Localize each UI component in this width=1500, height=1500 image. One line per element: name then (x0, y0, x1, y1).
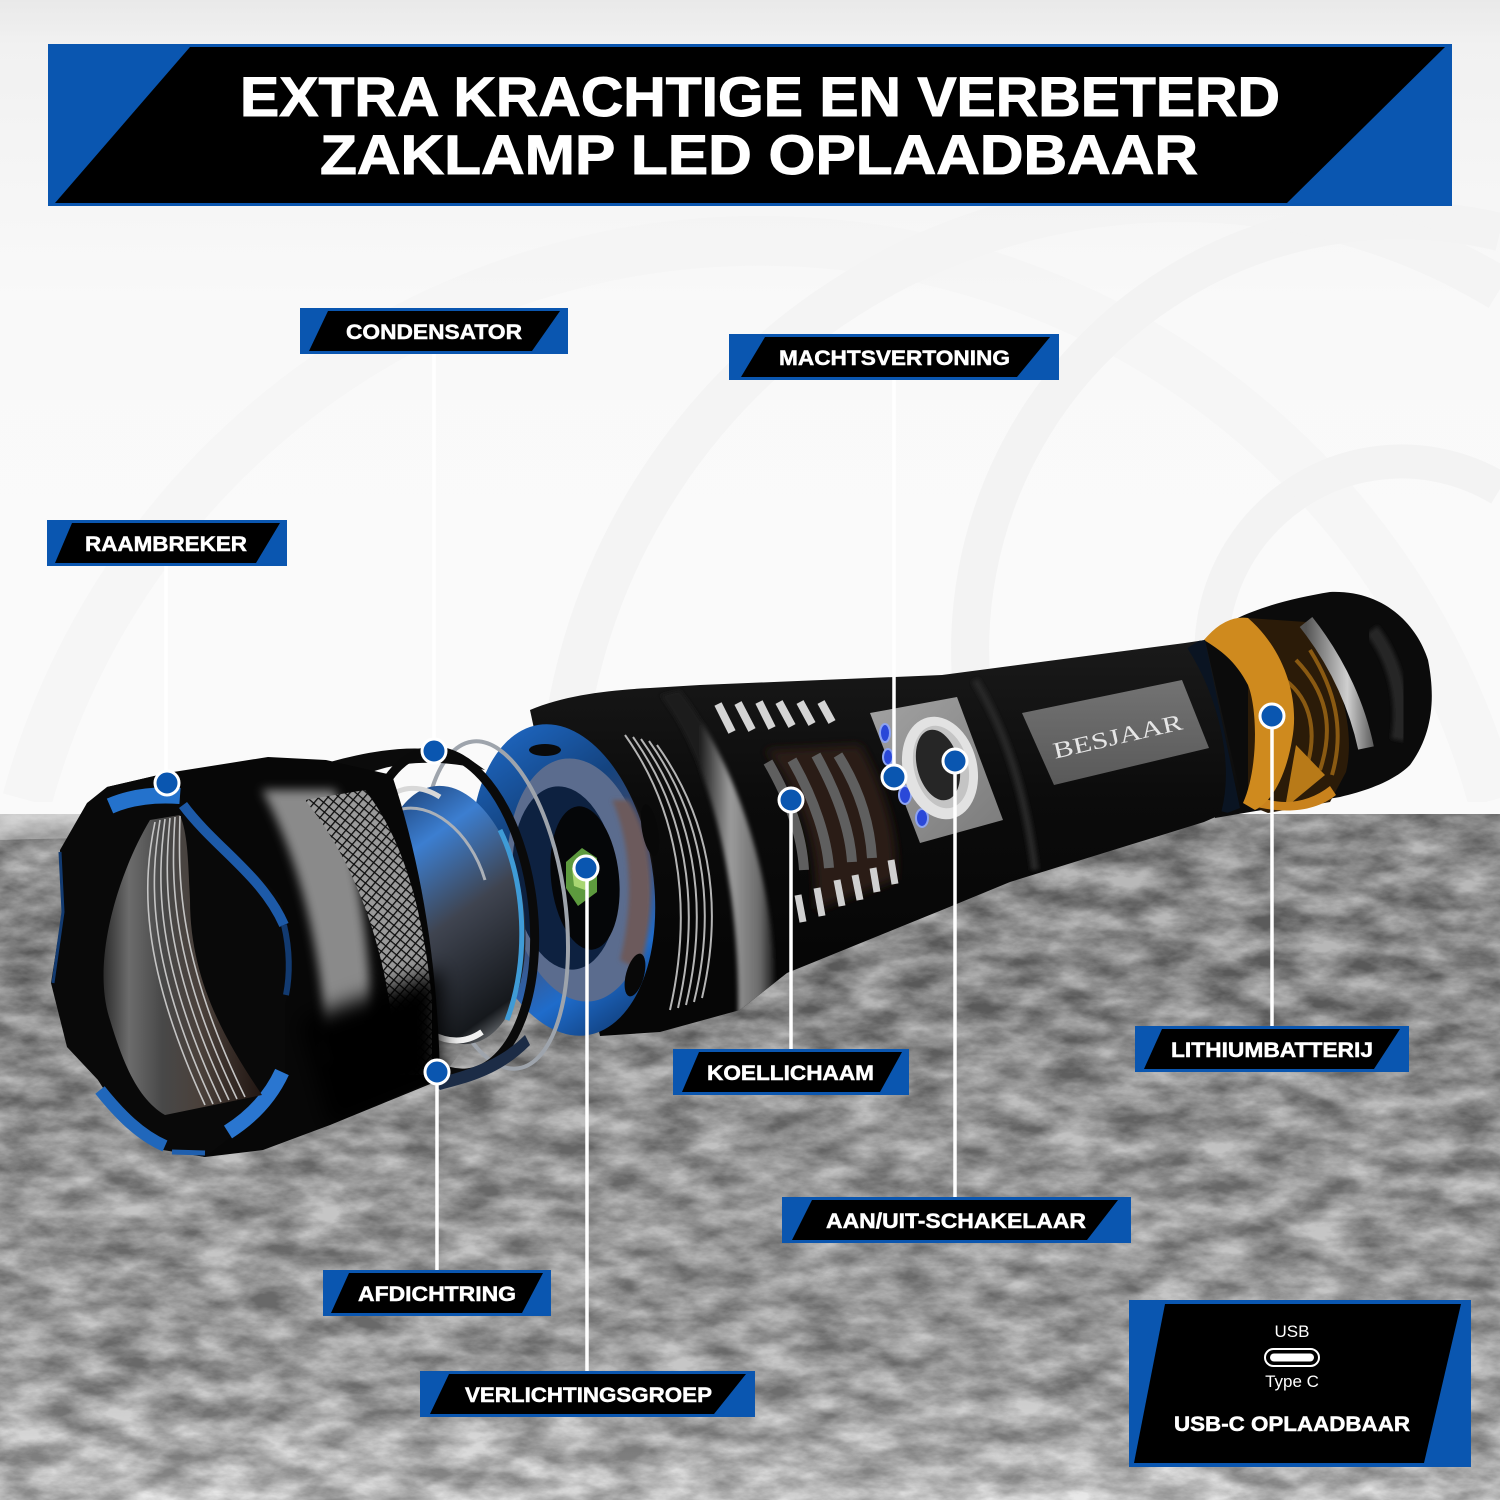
blue rim highlights (53, 795, 289, 1153)
power display panel with LEDs and switch (870, 697, 1003, 843)
label: afdichtring: AFDICHTRING (358, 1283, 516, 1306)
icon: USB-C connector (1265, 1349, 1319, 1366)
orange battery contact ring (1204, 618, 1366, 813)
label: lithiumbatterij: LITHIUMBATTERIJ (1171, 1039, 1373, 1062)
flashlight illustration (51, 592, 1432, 1157)
head body with knurled grip (98, 757, 442, 1157)
panel: USB-C charging badge: Type C (1265, 1372, 1319, 1391)
label: koellichaam (673, 1049, 909, 1095)
glass lens dome (363, 776, 541, 1054)
callout leader lines (166, 354, 1272, 1371)
label: verlichtingsgroep: VERLICHTINGSGROEP (465, 1384, 712, 1407)
flashlight body tube (530, 640, 1243, 1036)
title banner (48, 44, 1452, 206)
threaded inner sleeve (104, 815, 262, 1115)
title text: ZAKLAMP LED OPLAADBAAR (320, 123, 1198, 186)
title text: EXTRA KRACHTIGE EN VERBETERD (240, 65, 1280, 128)
label: afdichtring (323, 1270, 551, 1316)
callout marker dots (155, 704, 1284, 1084)
silver collar and threads (625, 690, 775, 1015)
panel: USB-C charging badge: USB-C OPLAADBAAR (1174, 1413, 1410, 1436)
label: raambreker (47, 520, 287, 566)
label: condensator (300, 308, 568, 354)
brand plate (1022, 680, 1209, 785)
panel: USB-C charging badge: USB (1275, 1322, 1309, 1341)
label: raambreker: RAAMBREKER (85, 533, 247, 556)
black seal ring (330, 741, 552, 1090)
green LED chip (566, 848, 597, 906)
label: condensator: CONDENSATOR (346, 321, 522, 344)
label: machtsvertoning (729, 334, 1059, 380)
label: aan/uit-schakelaar: AAN/UIT-SCHAKELAAR (826, 1210, 1086, 1233)
blue LED housing ring (450, 711, 676, 1049)
blue indicator LEDs (880, 724, 928, 827)
panel: USB-C charging badge (1129, 1300, 1471, 1467)
heat sink fins (718, 702, 896, 922)
title text (240, 65, 1280, 186)
brand plate: BESJAAR (1051, 709, 1186, 764)
thin silver condenser ring (403, 732, 587, 1078)
label: machtsvertoning: MACHTSVERTONING (779, 347, 1010, 370)
tail cap (1204, 592, 1432, 818)
background: mottled grey concrete floor (0, 802, 1500, 1500)
label: lithiumbatterij (1135, 1026, 1409, 1072)
label: koellichaam: KOELLICHAAM (707, 1062, 874, 1085)
scalloped front bezel (51, 773, 291, 1157)
label: verlichtingsgroep (420, 1371, 755, 1417)
power switch (892, 709, 988, 827)
label: aan/uit-schakelaar (782, 1197, 1131, 1243)
